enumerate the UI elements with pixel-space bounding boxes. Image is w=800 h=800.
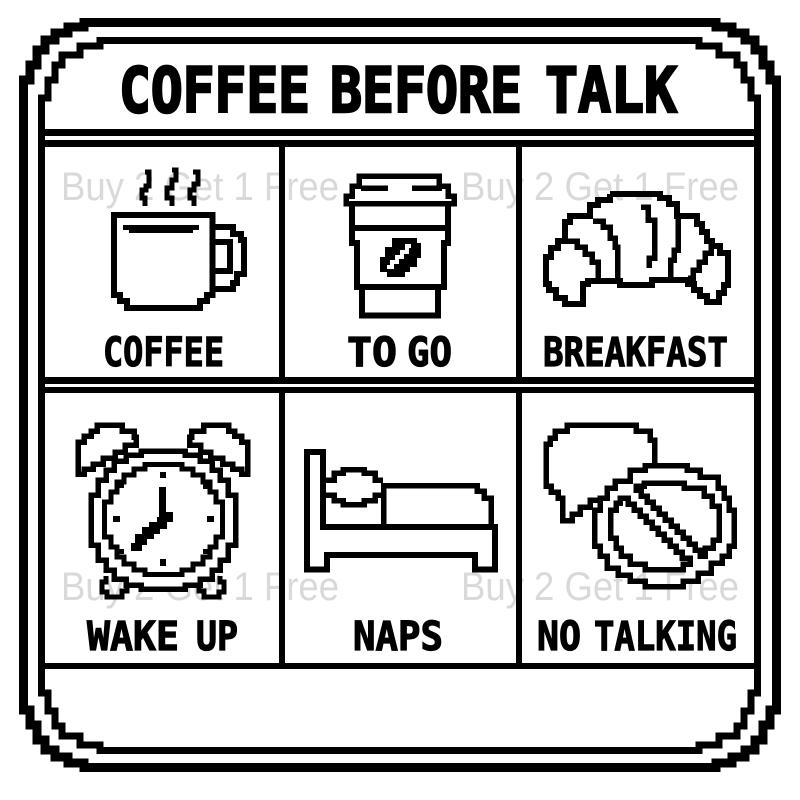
icon: alarm clock bbox=[78, 425, 248, 597]
clock outer ring bbox=[91, 451, 236, 589]
prohibition ring bbox=[594, 466, 734, 586]
label: no talking bbox=[537, 614, 737, 660]
label: wake up: WAKE bbox=[87, 614, 179, 660]
label: naps: NAPS bbox=[353, 614, 443, 660]
mug body bbox=[114, 215, 212, 308]
panel: wake up bbox=[78, 425, 248, 660]
watermark: bottom left: Buy 2 Get 1 Free bbox=[61, 565, 339, 609]
speech bubble bbox=[546, 425, 654, 520]
mug handle bbox=[215, 227, 244, 289]
steam bbox=[142, 170, 198, 206]
cup lid bbox=[346, 176, 454, 204]
panel: naps bbox=[307, 452, 495, 660]
bed frame bbox=[307, 452, 495, 570]
title: BEFORE bbox=[330, 54, 522, 127]
left foot bbox=[102, 576, 127, 597]
upper half of inner sign bbox=[636, 483, 719, 556]
title: COFFEE bbox=[119, 54, 310, 127]
lower half of inner sign bbox=[610, 498, 690, 570]
label: no talking: TALKING bbox=[594, 614, 737, 660]
label: to go bbox=[347, 330, 452, 376]
panel: breakfast bbox=[543, 194, 728, 376]
label: wake up bbox=[87, 614, 238, 660]
cup body bbox=[349, 206, 451, 316]
pillow bbox=[325, 470, 383, 504]
clock inner ring bbox=[104, 464, 222, 574]
left bell bbox=[78, 425, 136, 474]
label: coffee: COFFEE bbox=[103, 330, 224, 376]
label: wake up: UP bbox=[196, 614, 238, 660]
icon: takeaway cup bbox=[346, 176, 454, 316]
right bell bbox=[190, 425, 248, 474]
watermark: top left: Buy 2 Get 1 Free bbox=[61, 165, 339, 209]
title: TALK bbox=[545, 54, 678, 127]
label: to go: TO bbox=[347, 330, 397, 376]
mattress bbox=[384, 486, 491, 525]
icon: speech bubble with prohibition sign bbox=[546, 425, 734, 586]
panel: coffee bbox=[103, 170, 244, 376]
coffee bean bbox=[380, 238, 421, 277]
panel: no talking bbox=[537, 425, 737, 660]
hour ticks bbox=[113, 472, 214, 566]
icon: bed bbox=[307, 452, 495, 570]
icon: steaming coffee mug bbox=[114, 170, 244, 308]
panel: to go bbox=[346, 176, 454, 376]
clock hands bbox=[131, 487, 173, 551]
mug lip bbox=[123, 225, 199, 233]
icon: croissant bbox=[546, 194, 728, 304]
croissant folds bbox=[562, 207, 711, 280]
grid lines bbox=[41, 129, 757, 669]
label: breakfast: BREAKFAST bbox=[543, 330, 728, 376]
inner frame bbox=[42, 40, 758, 750]
title bbox=[119, 54, 678, 127]
bean crack bbox=[387, 246, 411, 267]
label: no talking: NO bbox=[537, 614, 581, 660]
croissant outline bbox=[546, 194, 728, 304]
label: to go: GO bbox=[407, 330, 452, 376]
watermark: top right: Buy 2 Get 1 Free bbox=[461, 165, 739, 209]
watermark: bottom right: Buy 2 Get 1 Free bbox=[461, 565, 739, 609]
right foot bbox=[199, 576, 224, 597]
